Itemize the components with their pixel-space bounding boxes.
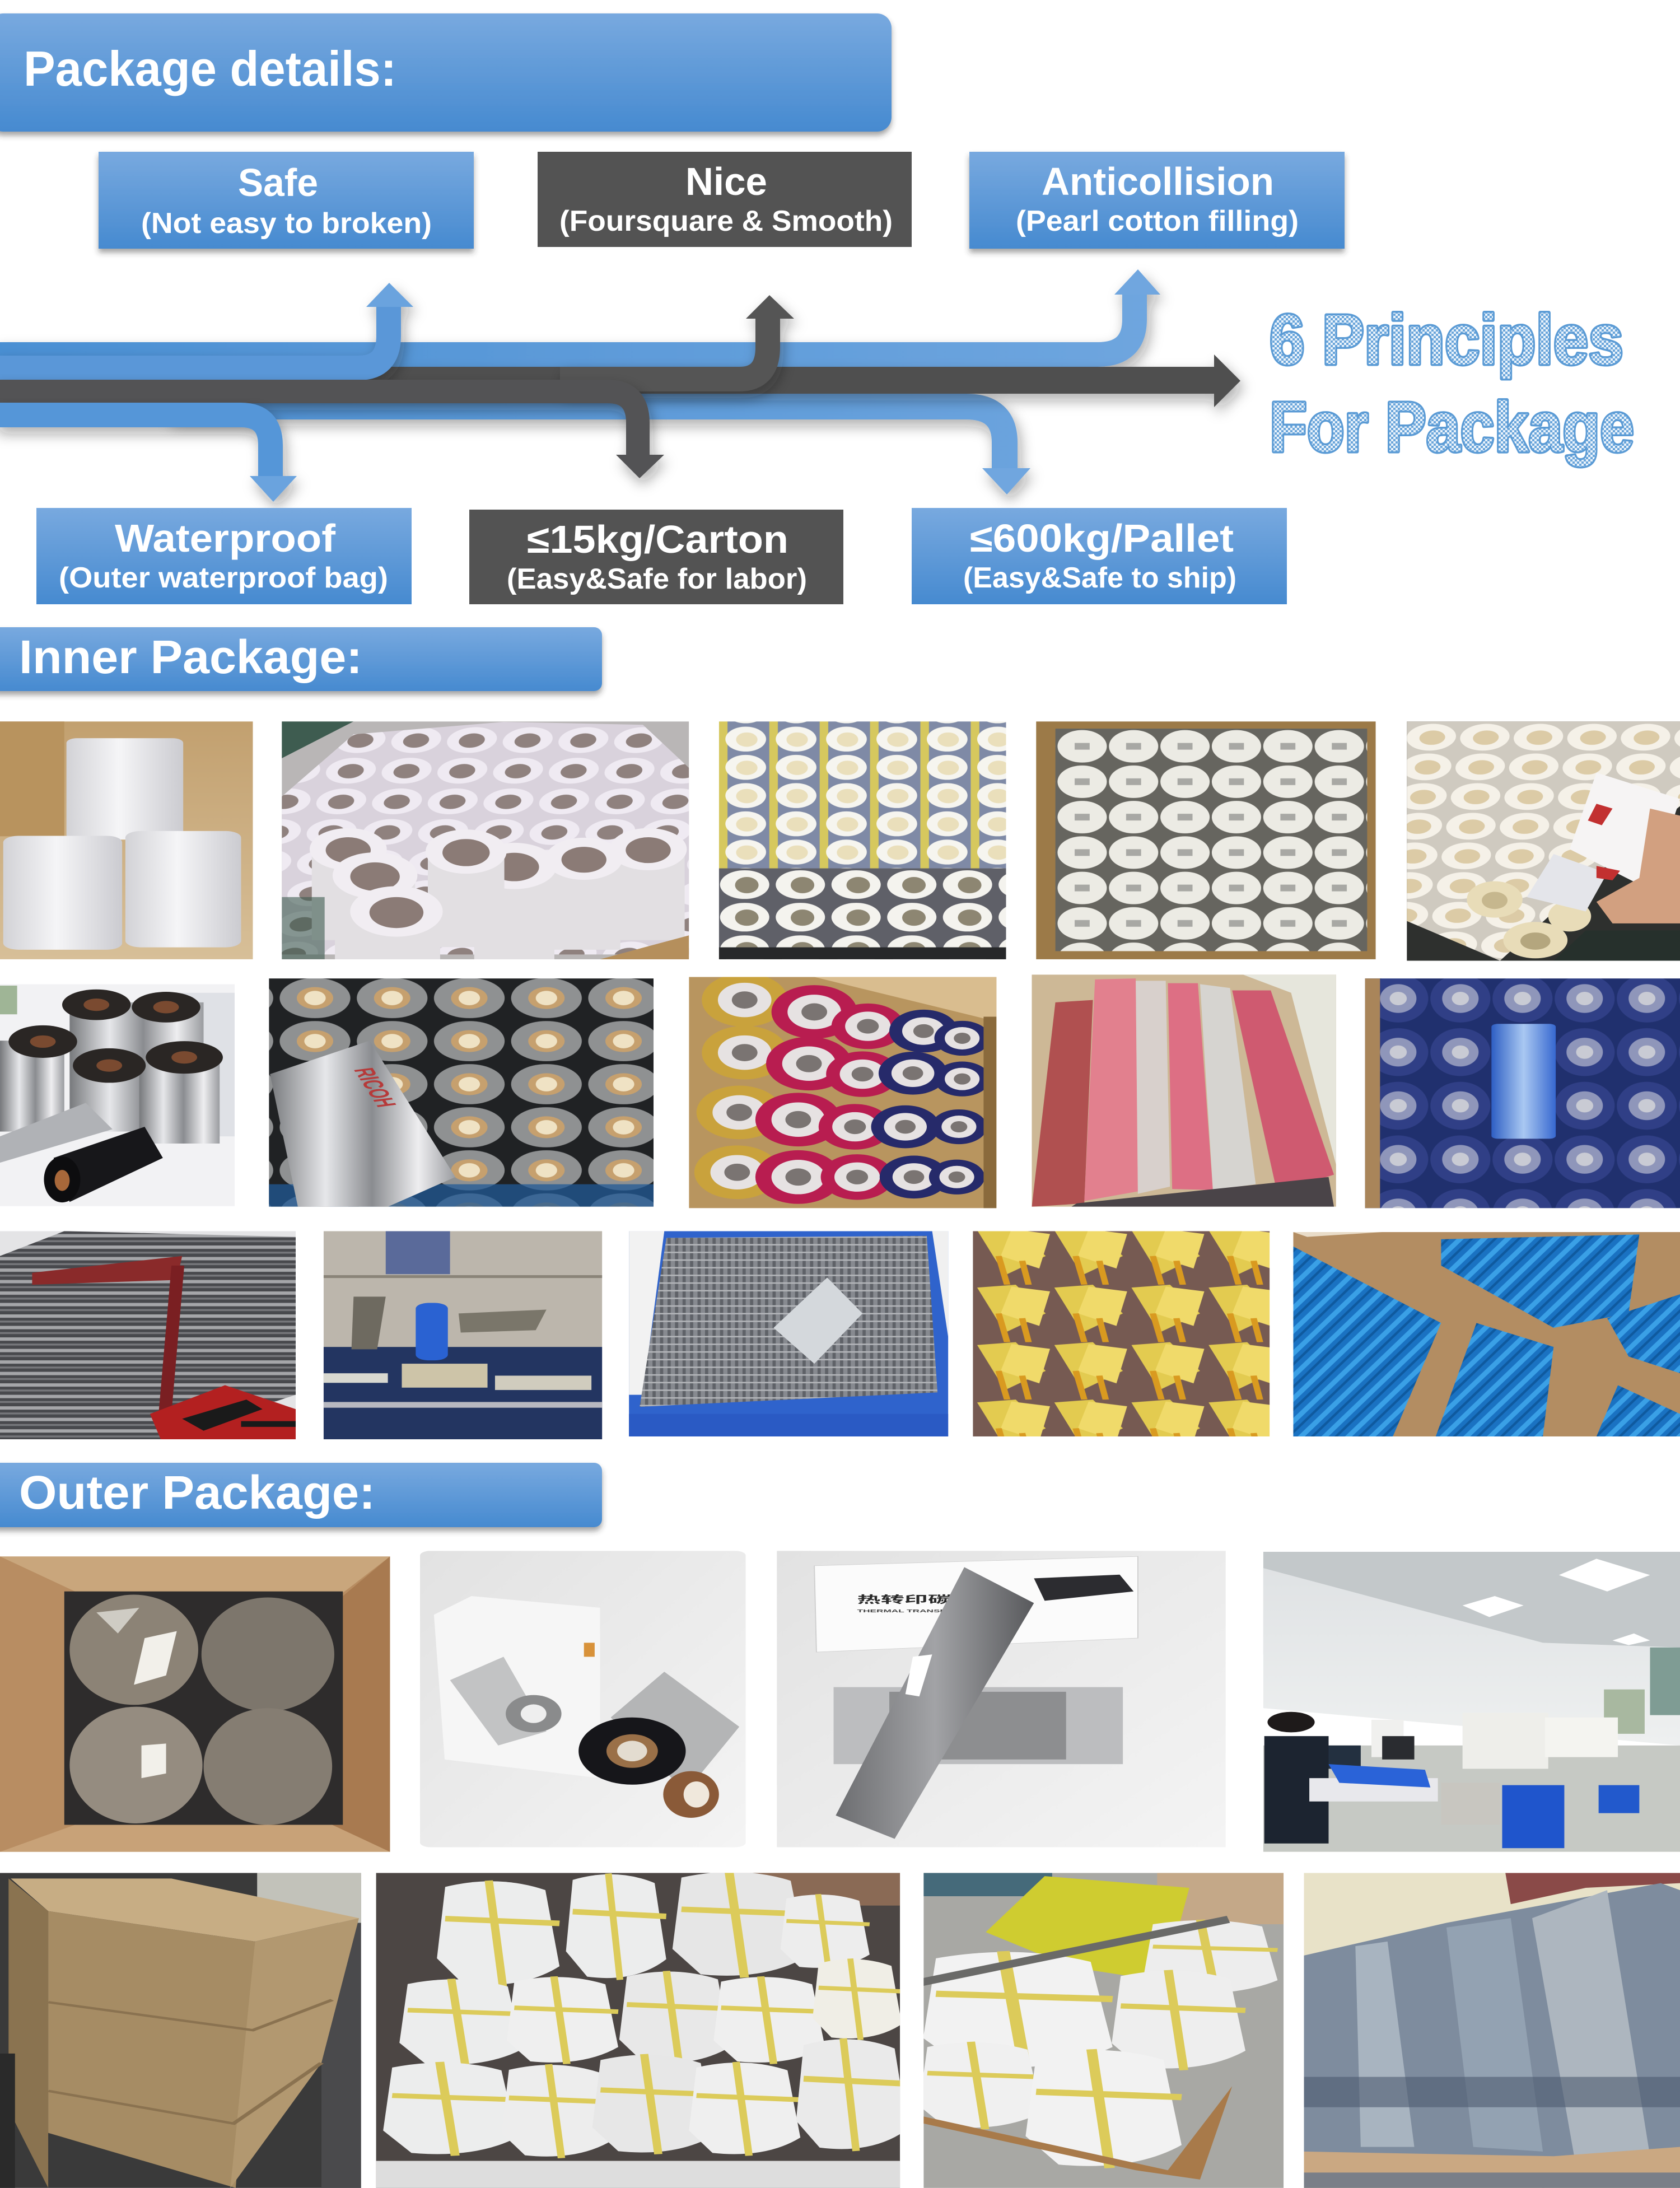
box: Nice: Nice xyxy=(685,160,767,203)
arrow: lower long band to Pallet xyxy=(168,407,1030,494)
photo: blue tags in cartons xyxy=(1293,1232,1680,1436)
box: 15kg per carton: (Easy&Safe for labor) xyxy=(507,563,807,595)
title: 6 Principles For Package: 6 Principles xyxy=(1270,300,1623,379)
photo: stacked dark foil packs with red bits xyxy=(0,1231,296,1439)
photo: silver ribbon rolls: RICOH xyxy=(347,1066,402,1109)
arrow: to Anticollision xyxy=(0,269,1160,354)
photo section: outer package photos xyxy=(0,1551,1680,2188)
photo: chrome and black ribbon rolls on white xyxy=(0,985,235,1206)
photo: shrink-wrapped tall pallets xyxy=(1304,1873,1680,2188)
box: Waterproof: (Outer waterproof bag) xyxy=(59,562,388,594)
box: Waterproof xyxy=(36,508,412,604)
arrow diagram: six branching arrows xyxy=(0,269,1240,502)
arrow: to Waterproof xyxy=(0,415,297,502)
box: 600kg per pallet xyxy=(912,508,1287,604)
photo: three white label rolls on cardboard xyxy=(0,721,253,959)
photo: stacked cartons on pallet xyxy=(0,1873,361,2188)
photo section: inner package photos xyxy=(0,721,1680,1439)
heading text: Package details: Package details: xyxy=(24,41,396,96)
header: Package details xyxy=(0,13,892,132)
box: Anticollision xyxy=(969,152,1345,249)
photo: pink and silver film tubes xyxy=(1032,974,1336,1207)
box: Safe xyxy=(99,152,474,249)
photo: silver packs in blue crate xyxy=(629,1231,949,1436)
photo: foil bags in open carton xyxy=(0,1556,390,1852)
box: 15kg per carton: ≤15kg/Carton xyxy=(527,517,788,561)
box: Nice: (Foursquare & Smooth) xyxy=(559,205,893,237)
photo: thermal transfer ribbon packaging: 热转印碳带 xyxy=(857,1594,975,1606)
photo: rolls in clear plastic wrap xyxy=(282,721,689,959)
photo: yellow, red and navy ribbon rolls in carton xyxy=(689,977,997,1209)
box: 15kg per carton xyxy=(469,510,843,604)
photo: yellow and white bags on wooden pallet xyxy=(919,1873,1284,2188)
title: 6 Principles For Package: For Package xyxy=(1270,388,1634,466)
photo: silver ribbon rolls xyxy=(269,978,654,1207)
arrow: main dark arrow xyxy=(0,354,1240,407)
photo: white box and black ribbon roll xyxy=(420,1551,746,1847)
box: Anticollision: (Pearl cotton filling) xyxy=(1016,205,1299,237)
photo: packing workshop with staff and blue crates xyxy=(1263,1552,1680,1852)
box: 600kg per pallet: ≤600kg/Pallet xyxy=(970,516,1234,560)
photo: hand holding ribbon over cream rolls xyxy=(1407,721,1680,961)
photo: white core rolls in rows xyxy=(719,721,1006,959)
box: 600kg per pallet: (Easy&Safe to ship) xyxy=(963,562,1236,594)
box: Safe: Safe xyxy=(238,161,318,204)
box: Safe: (Not easy to broken) xyxy=(141,207,432,240)
photo: white rolls in a carton xyxy=(1036,721,1376,959)
photo: thermal transfer ribbon packaging: THERMAL TRANSFER RIBBON xyxy=(857,1608,1000,1613)
title: 6 Principles For Package xyxy=(1270,300,1634,466)
box: Anticollision: Anticollision xyxy=(1042,160,1274,203)
header: Outer Package: Outer Package: xyxy=(19,1466,375,1519)
header: Inner Package xyxy=(0,627,602,691)
arrow: to Safe xyxy=(0,283,413,368)
arrow: to Nice xyxy=(560,295,794,379)
box: Nice xyxy=(538,152,912,247)
photo: thermal transfer ribbon packaging xyxy=(777,1551,1225,1847)
photo: grey packs with blue sample xyxy=(324,1231,603,1439)
photo: yellow tag bundles xyxy=(973,1231,1270,1436)
header: Inner Package: Inner Package: xyxy=(19,631,362,683)
photo: white woven bags with yellow straps xyxy=(376,1871,908,2188)
header: Outer Package xyxy=(0,1463,602,1527)
box: Waterproof: Waterproof xyxy=(115,516,336,560)
arrow: to 15kg Carton xyxy=(0,391,664,478)
photo: navy blue ribbon rolls in carton xyxy=(1365,978,1680,1209)
